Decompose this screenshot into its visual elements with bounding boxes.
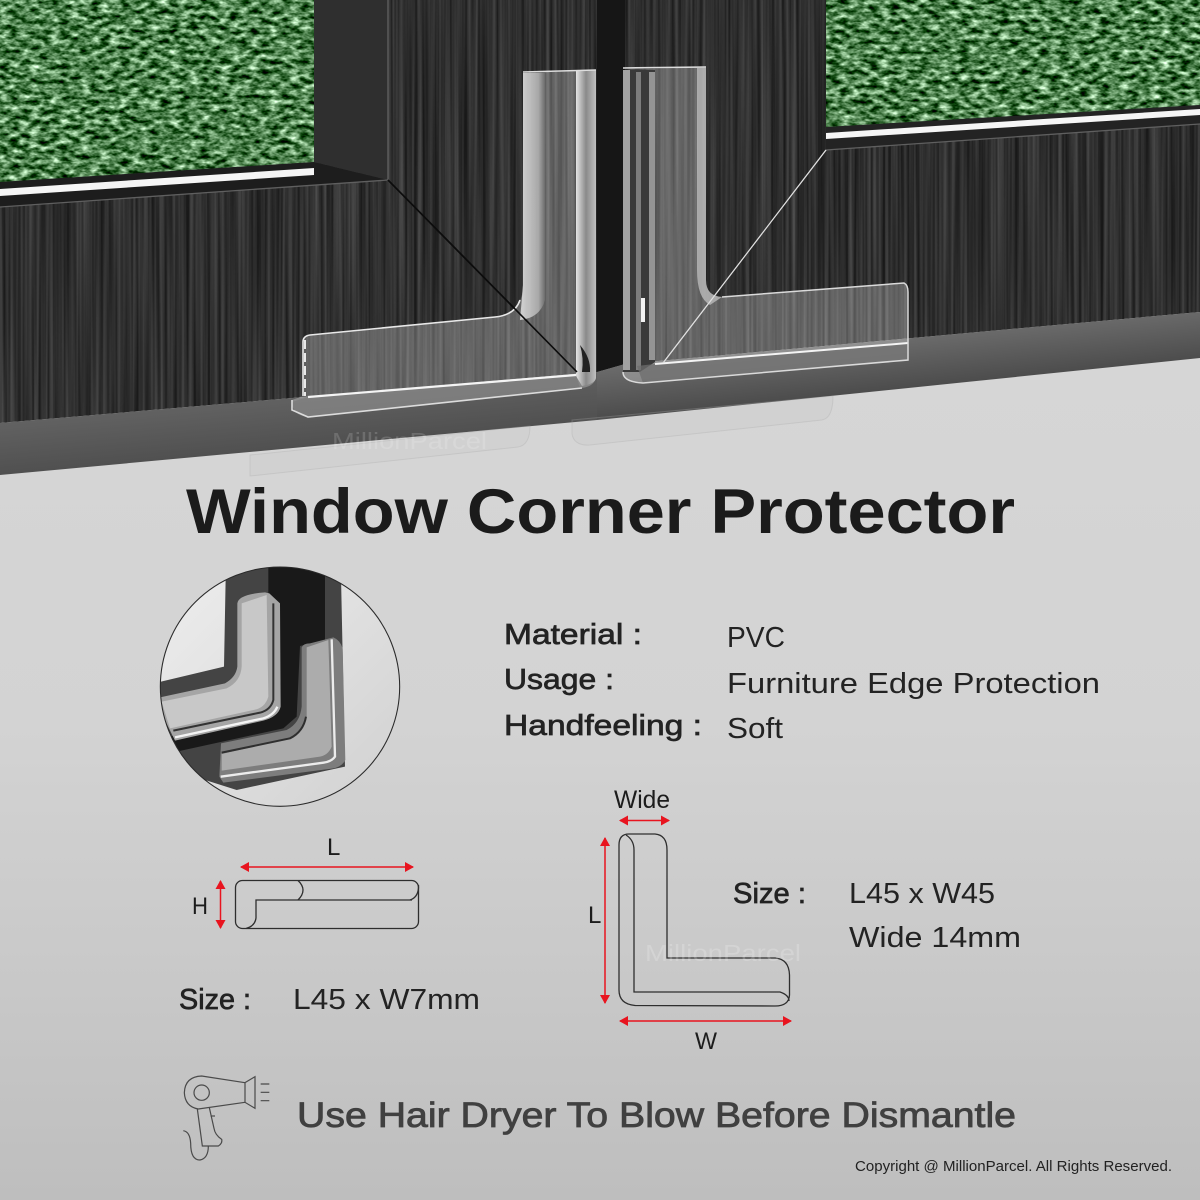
right size text: Wide 14mm	[849, 922, 1021, 954]
handfeeling spec: Soft	[727, 713, 783, 745]
right size text: Size :	[733, 878, 806, 910]
window glass showing greenery, left	[0, 0, 316, 190]
width arrow	[620, 1020, 791, 1022]
handfeeling spec	[504, 710, 783, 745]
material spec: PVC	[727, 622, 785, 654]
wide arrow	[620, 820, 669, 822]
material spec: Material :	[504, 619, 642, 651]
diagram: height and length of the lip	[192, 834, 419, 928]
right clear corner protector	[623, 67, 908, 383]
label Wide: Wide	[614, 786, 670, 814]
usage spec	[504, 664, 1100, 700]
usage spec: Furniture Edge Protection	[727, 668, 1100, 700]
label H: H	[192, 893, 208, 920]
circle outline	[160, 567, 400, 806]
lip outline	[236, 880, 419, 928]
photo: window frame with two clear corner protectors	[0, 0, 1200, 476]
icon: hair dryer	[183, 1076, 269, 1160]
window glass showing greenery, right	[824, 0, 1200, 130]
dark window frame	[0, 0, 1200, 440]
white sill strips	[0, 109, 1200, 196]
circle image contents	[160, 568, 386, 806]
reflections on the wall	[250, 396, 833, 476]
handfeeling spec: Handfeeling :	[504, 710, 702, 742]
watermark: MillionParcel	[645, 940, 801, 966]
height arrow	[220, 881, 222, 928]
left size text: L45 x W7mm	[293, 984, 480, 1016]
label W: W	[695, 1028, 717, 1055]
material spec	[504, 619, 785, 654]
left size text	[179, 984, 480, 1016]
right size text: L45 x W45	[849, 878, 995, 910]
length arrow	[604, 838, 606, 1003]
left clear corner protector	[292, 70, 596, 417]
right size text	[733, 878, 1021, 954]
grey sill band	[0, 312, 1200, 475]
spec labels and values	[504, 619, 1100, 745]
left size text: Size :	[179, 984, 251, 1016]
L-shape outline	[619, 834, 790, 1006]
copyright line: Copyright @ MillionParcel. All Rights Reserved.	[855, 1159, 1172, 1175]
watermark on wall: MillionParcel	[332, 428, 487, 454]
circular close-up photo of protectors on a frame	[160, 566, 400, 807]
label L: L	[588, 902, 601, 929]
title: Window Corner Protector	[186, 477, 1015, 547]
diagram: L-shaped protector dimensions	[588, 786, 791, 1055]
instruction: hair dryer tip: Use Hair Dryer To Blow Before Dismantle	[297, 1096, 1016, 1135]
label L: L	[327, 834, 340, 861]
length arrow	[241, 866, 413, 868]
usage spec: Usage :	[504, 664, 614, 696]
